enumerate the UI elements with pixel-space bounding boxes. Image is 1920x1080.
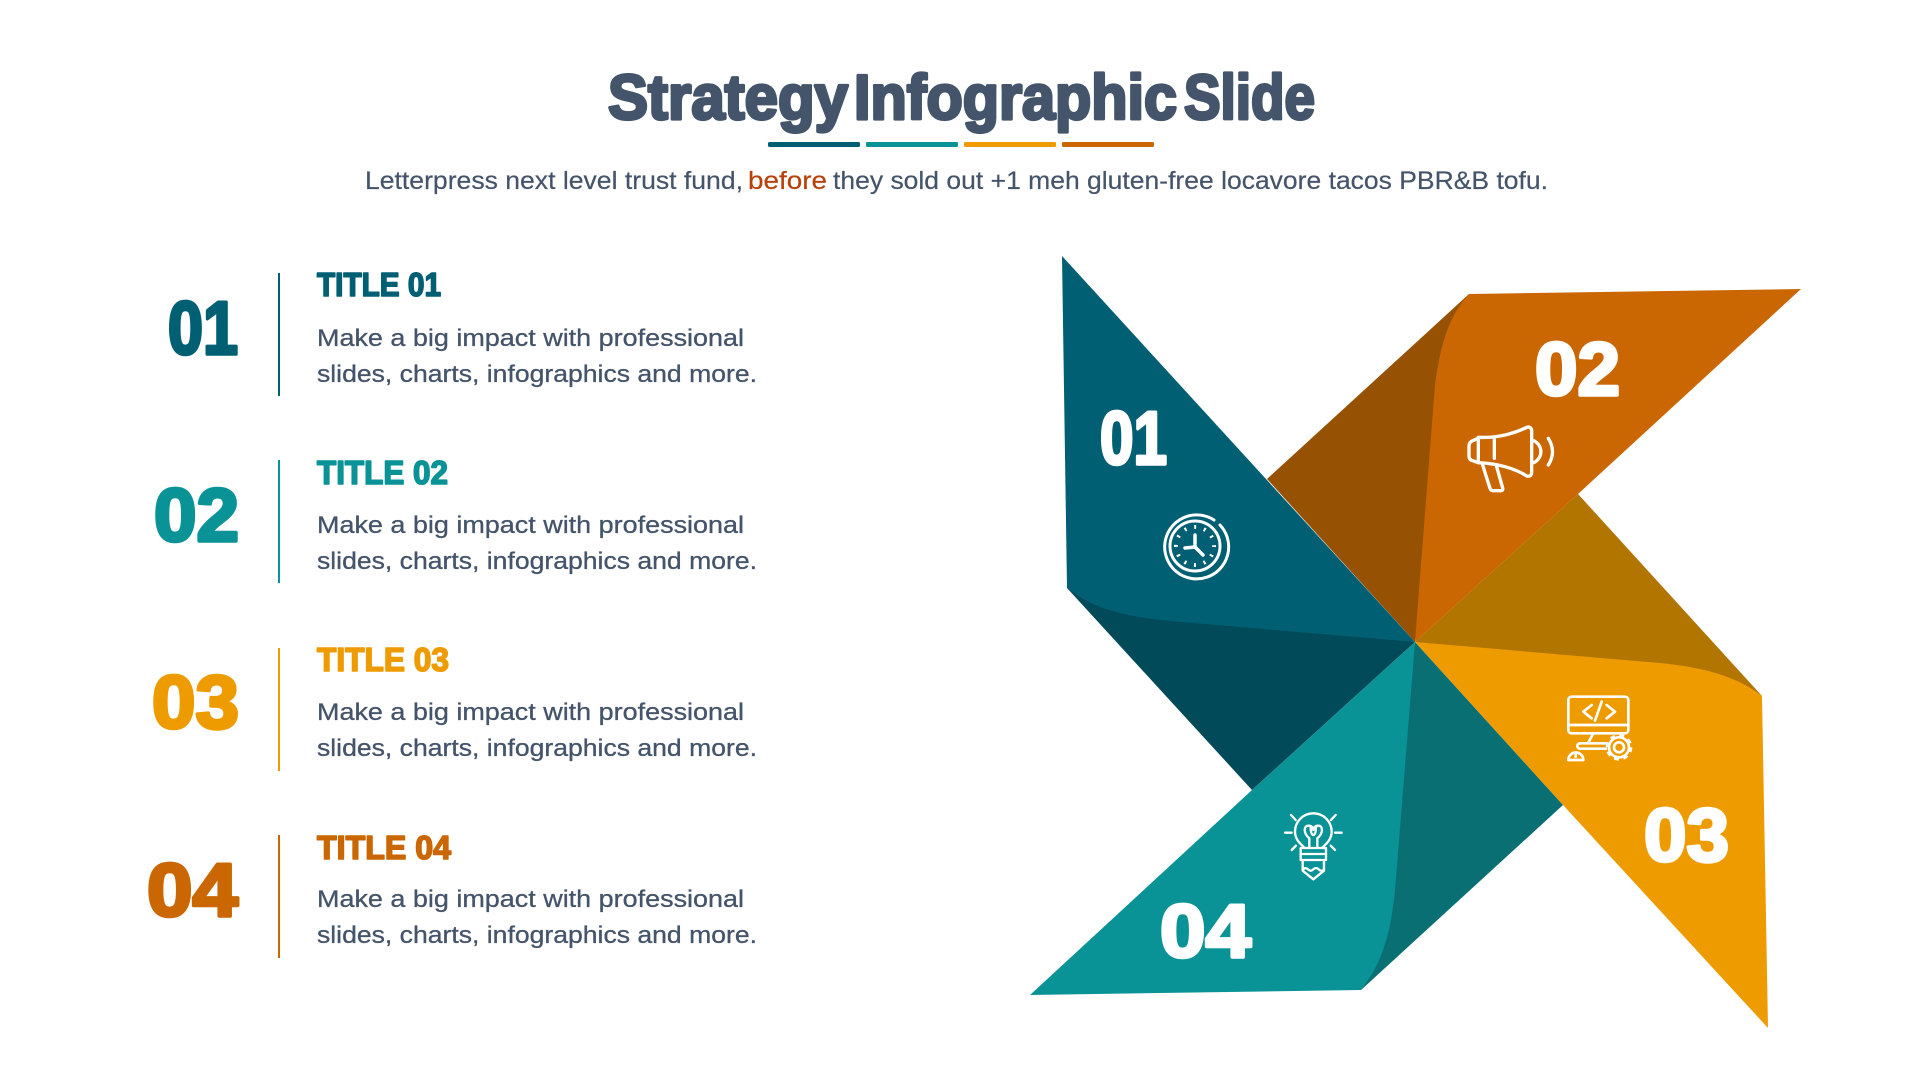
heading 03: TITLE 03: [317, 641, 449, 678]
icon: computer with gear: [1568, 697, 1631, 760]
number 01: 01: [168, 286, 238, 370]
title underline bars: [768, 142, 1154, 147]
description 04: Make a big impact with professional: [317, 886, 744, 913]
subtitle: before: [748, 167, 827, 195]
title: Infographic: [854, 63, 1177, 133]
blade 02: [1415, 289, 1801, 642]
list item 04: [147, 829, 757, 958]
number 04: 04: [147, 848, 238, 932]
blade number 03: 03: [1644, 793, 1729, 877]
description 04: [317, 886, 757, 949]
fold shadows: [1067, 294, 1762, 990]
subtitle: [365, 167, 1548, 195]
description 01: [317, 325, 757, 388]
description 03: Make a big impact with professional: [317, 699, 744, 726]
list item 02: [154, 454, 757, 583]
description 01: slides, charts, infographics and more.: [317, 361, 757, 388]
subtitle: they sold out +1 meh gluten-free locavore tacos PBR&B tofu.: [833, 167, 1548, 195]
icon: clock: [1165, 515, 1229, 579]
number 02: 02: [154, 473, 239, 557]
description 02: Make a big impact with professional: [317, 512, 744, 539]
icon: megaphone: [1469, 427, 1552, 491]
number 03: 03: [152, 660, 239, 744]
heading 01: TITLE 01: [317, 266, 441, 303]
description 03: [317, 699, 757, 762]
description 02: [317, 512, 757, 575]
pinwheel diagram: [1030, 256, 1801, 1028]
description 02: slides, charts, infographics and more.: [317, 548, 757, 575]
subtitle: Letterpress next level trust fund,: [365, 167, 743, 195]
blade 03: [1415, 642, 1768, 1028]
list item 01: [168, 266, 757, 396]
blade number 04: 04: [1160, 889, 1251, 973]
heading 02: TITLE 02: [317, 454, 448, 491]
blade 04: [1030, 642, 1415, 995]
blade number 01: 01: [1100, 396, 1167, 480]
description 03: slides, charts, infographics and more.: [317, 735, 757, 762]
description 04: slides, charts, infographics and more.: [317, 922, 757, 949]
list item 03: [152, 641, 757, 771]
title: [608, 63, 1315, 133]
heading 04: TITLE 04: [317, 829, 452, 866]
blade 01: [1062, 256, 1415, 642]
title: Strategy: [608, 63, 848, 133]
description 01: Make a big impact with professional: [317, 325, 744, 352]
blade number 02: 02: [1535, 327, 1620, 411]
title: Slide: [1184, 63, 1315, 133]
icon: light bulb pencil: [1285, 813, 1342, 879]
